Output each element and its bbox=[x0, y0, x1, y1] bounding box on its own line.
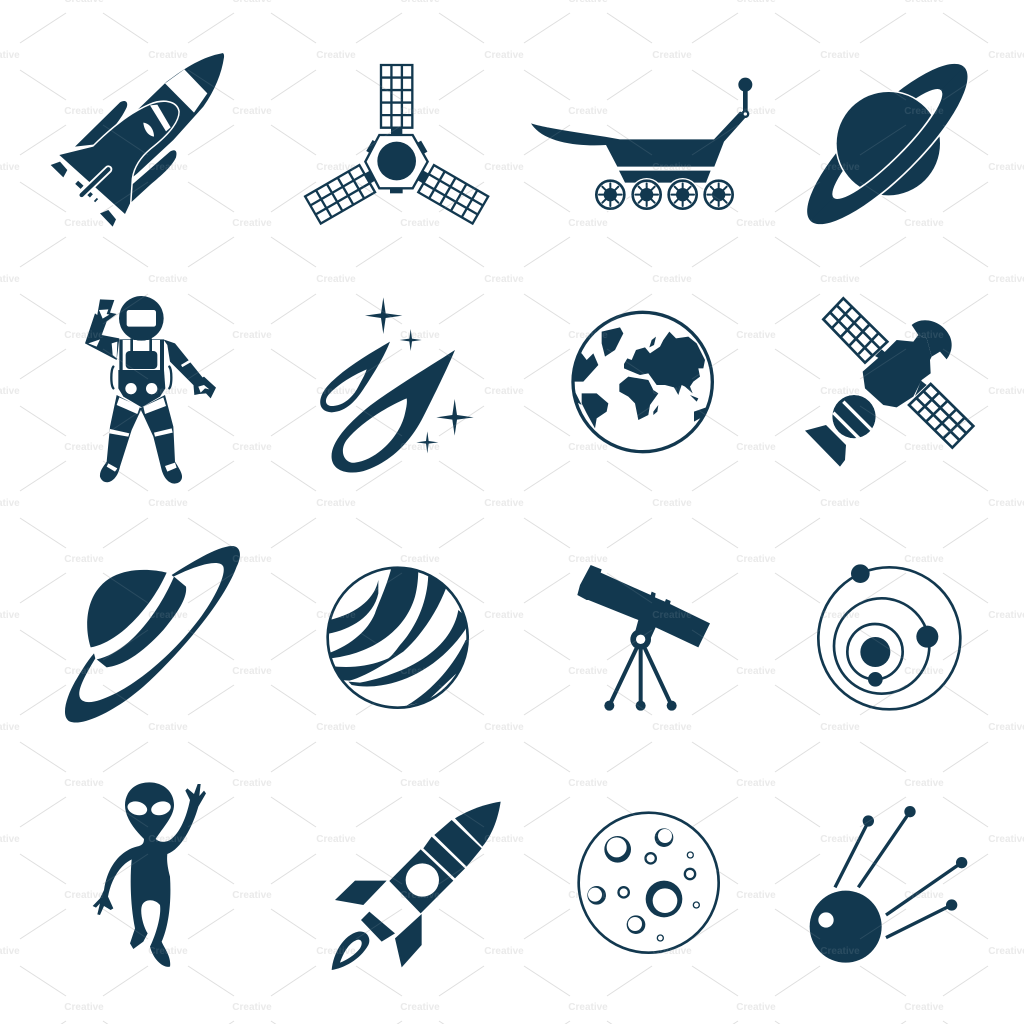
icon: ringed planet bbox=[807, 64, 968, 224]
torso upper shell bbox=[119, 339, 164, 370]
icon: telescope on tripod bbox=[577, 565, 710, 711]
raised arm and glove bbox=[85, 313, 119, 360]
legs bbox=[100, 395, 182, 484]
icon: planet with wide ring bbox=[65, 546, 240, 723]
helmet bbox=[119, 296, 164, 341]
lower torso bbox=[118, 370, 165, 407]
right arm and glove bbox=[163, 339, 203, 385]
icon: comets and stars bbox=[320, 297, 474, 473]
wheel 2 bbox=[630, 178, 663, 211]
icon: space shuttle bbox=[51, 53, 224, 227]
icon: sputnik bbox=[810, 806, 967, 963]
icon: earth globe bbox=[563, 312, 717, 452]
icon: rocket bbox=[332, 802, 501, 970]
icon: astronaut bbox=[85, 296, 216, 484]
icon: communication satellite bbox=[805, 298, 973, 467]
icon: striped planet bbox=[327, 567, 470, 708]
icon: waving alien bbox=[93, 782, 206, 967]
solar panel top bbox=[381, 65, 412, 128]
wheel 4 bbox=[702, 178, 735, 211]
icon: moon rover bbox=[531, 78, 752, 211]
icon: cratered moon bbox=[579, 813, 719, 953]
solar panel right bbox=[418, 165, 488, 224]
icon: three-panel satellite bbox=[305, 65, 488, 224]
wheel 1 bbox=[594, 178, 627, 211]
icon: solar system bbox=[818, 564, 960, 709]
wheel 3 bbox=[666, 178, 699, 211]
solar panel left bbox=[305, 165, 375, 224]
